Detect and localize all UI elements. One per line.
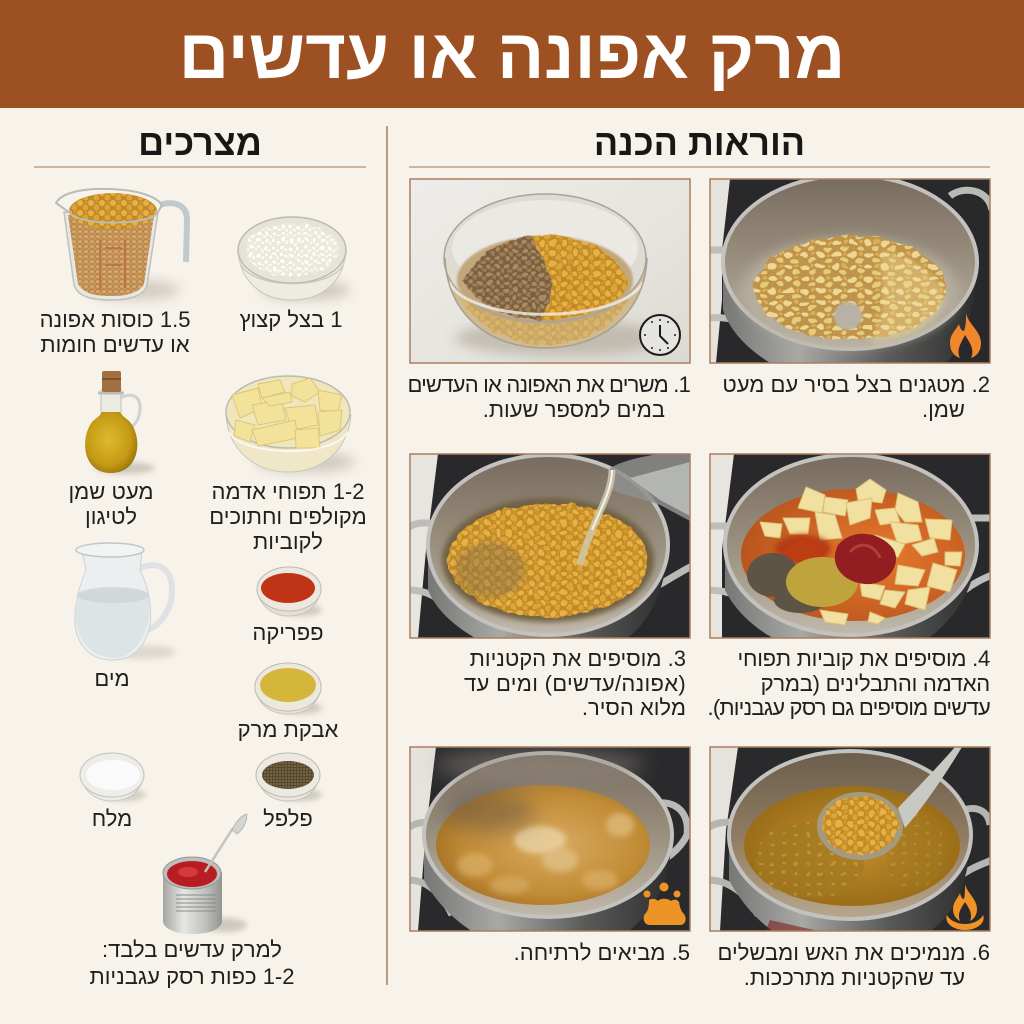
step 4 image: potatoes and spices in pot <box>709 453 991 639</box>
caption: step 1: במים למספר שעות. <box>483 396 665 422</box>
ingredient label: onion: 1 בצל קצוץ <box>239 307 343 332</box>
ingredient label: potatoes: מקולפים וחתוכים <box>209 504 367 529</box>
caption: step 1 <box>407 372 690 422</box>
caption: step 2: שמן. <box>922 396 965 422</box>
header banner <box>0 0 1024 108</box>
caption: step 3 <box>464 646 686 720</box>
ingredient label: oil <box>68 479 154 529</box>
panel: preparation instructions <box>409 133 991 989</box>
step 3 image: adding legumes and water <box>409 453 691 639</box>
heading: instructions: הוראות הכנה <box>594 122 805 163</box>
step 1 image: soaking bowl <box>409 178 691 364</box>
step 5 image: boiling soup <box>409 746 691 932</box>
ingredient label: pepper: פלפל <box>263 806 313 831</box>
ingredient label: water: מים <box>94 666 130 691</box>
caption: step 2 <box>722 372 990 422</box>
ingredient label: salt: מלח <box>92 806 132 831</box>
ingredient label: potatoes: 1-2 תפוחי אדמה <box>212 479 364 504</box>
ingredient label: soup powder: אבקת מרק <box>238 717 338 742</box>
ingredient label: legumes: 1.5 כוסות אפונה <box>40 307 190 332</box>
step 6 image: simmering with ladle <box>709 746 991 932</box>
ingredient label: potatoes: לקוביות <box>253 529 323 554</box>
caption: step 6: 6. מנמיכים את האש ומבשלים <box>718 940 990 965</box>
ingredient label: paprika: פפריקה <box>252 620 324 645</box>
ingredient label: potatoes <box>209 479 367 554</box>
caption: step 1: 1. משרים את האפונה או העדשים <box>407 372 690 397</box>
caption: step 6: עד שהקטניות מתרככות. <box>744 964 965 990</box>
caption: step 5: 5. מביאים לרתיחה. <box>514 940 690 965</box>
caption: step 4 <box>708 646 990 720</box>
ingredient label: legumes: או עדשים חומות <box>40 332 190 357</box>
heading: ingredients: מצרכים <box>138 122 262 163</box>
ingredient label: tomato paste <box>90 937 294 988</box>
caption: step 3: 3. מוסיפים את הקטניות <box>470 646 686 671</box>
ingredient label: tomato paste: למרק עדשים בלבד: <box>102 937 282 962</box>
caption: step 2: 2. מטגנים בצל בסיר עם מעט <box>722 372 990 397</box>
caption: step 4: האדמה והתבלינים (במרק <box>761 670 990 696</box>
ingredient label: legumes <box>40 307 190 357</box>
title: מרק אפונה או עדשים <box>179 15 845 93</box>
caption: step 4: עדשים מוסיפים גם רסק עגבניות). <box>708 695 990 720</box>
ingredient label: oil: לטיגון <box>85 504 137 529</box>
caption: step 3: מלוא הסיר. <box>582 695 686 720</box>
caption: step 3: (אפונה/עדשים) ומים עד <box>464 670 686 696</box>
ingredient label: oil: מעט שמן <box>68 479 154 504</box>
step 2 image: frying onion in pot <box>709 178 991 364</box>
potatoes <box>760 479 962 625</box>
caption: step 4: 4. מוסיפים את קוביות תפוחי <box>738 646 990 671</box>
ingredient label: tomato paste: 1-2 כפות רסק עגבניות <box>90 964 294 988</box>
caption: step 6 <box>718 940 990 990</box>
